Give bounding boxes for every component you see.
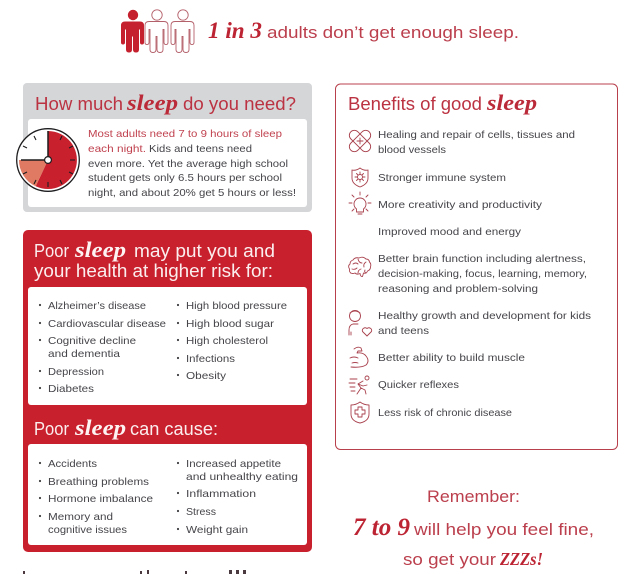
callout: remember: ZZZs! <box>499 549 543 569</box>
text block: sleep needs: Kids and teens need <box>149 143 252 155</box>
text block: sleep needs <box>88 128 296 199</box>
benefit: brain function: Better brain function including alertness, <box>378 253 586 265</box>
icon: immune shield <box>352 168 368 187</box>
list: health risks: High cholesterol <box>186 335 268 347</box>
heading: can cause <box>34 415 218 440</box>
list: effects: Accidents <box>48 458 97 470</box>
heading: can cause: sleep <box>74 415 126 440</box>
cropped text at bottom edge <box>23 570 246 574</box>
list: health risks <box>28 287 307 405</box>
heading: how much sleep: How much <box>35 94 123 114</box>
heading: higher risk: sleep <box>74 237 126 262</box>
heading: higher risk: may put you and <box>134 241 275 261</box>
panel: how much sleep do you need <box>16 83 312 212</box>
heading: benefits <box>348 90 537 115</box>
heading: how much sleep: do you need? <box>183 94 296 114</box>
list: effects: Memory and <box>48 511 113 523</box>
callout: remember: Remember: <box>427 487 520 506</box>
icon: bandage <box>347 128 373 154</box>
benefit: healing: Healing and repair of cells, tissues and <box>378 129 575 141</box>
list: effects: Breathing problems <box>48 476 149 488</box>
callout: remember: so get your <box>403 550 496 569</box>
callout: remember: 7 to 9 <box>353 514 410 541</box>
heading: higher risk <box>34 237 275 281</box>
heading: can cause: can cause: <box>130 419 218 439</box>
benefit: brain function: decision-making, focus, learning, memory, <box>378 268 587 280</box>
icon: flexed arm <box>350 347 368 367</box>
text block: sleep needs: Most adults need 7 to 9 hours of sleep <box>88 128 282 140</box>
list: health risks: High blood sugar <box>186 318 275 330</box>
list: effects: Stress <box>186 506 216 518</box>
text block: sleep needs: each night. <box>88 143 146 155</box>
list: health risks: and dementia <box>48 348 120 360</box>
headline emphasis: 1 in 3 <box>208 18 262 43</box>
benefit: muscle: Better ability to build muscle <box>378 352 525 364</box>
benefit: mood: Improved mood and energy <box>378 226 522 238</box>
icon: medical shield <box>351 402 369 423</box>
benefit: healing: blood vessels <box>378 144 446 156</box>
heading: benefits: sleep <box>486 90 537 115</box>
benefit: creativity: More creativity and productivity <box>378 199 543 211</box>
benefit: immune system: Stronger immune system <box>378 172 506 184</box>
list: health risks: Obesity <box>186 370 227 382</box>
heading: higher risk: Poor <box>34 241 69 261</box>
text block: sleep needs: night, and about 20% get 5 hours or less! <box>88 187 296 199</box>
list: effects: Inflammation <box>186 488 256 500</box>
heading: can cause: Poor <box>34 419 69 439</box>
list: effects: and unhealthy eating <box>186 471 298 483</box>
heading: benefits: Benefits of good <box>348 94 482 114</box>
list: health risks: Alzheimer’s disease <box>48 300 146 312</box>
list: health risks: Cognitive decline <box>48 335 136 347</box>
list: health risks: High blood pressure <box>186 300 287 312</box>
list: effects: cognitive issues <box>48 524 127 536</box>
list: effects <box>28 444 307 545</box>
benefit: growth: Healthy growth and development for kids <box>378 310 591 322</box>
list: effects: Weight gain <box>186 524 248 536</box>
heading: how much sleep <box>35 90 296 115</box>
list: effects: Hormone imbalance <box>48 493 153 505</box>
benefit: growth <box>378 310 591 337</box>
callout: remember: will help you feel fine, <box>413 520 594 539</box>
list: effects: Increased appetite <box>186 458 281 470</box>
benefit: growth: and teens <box>378 325 429 337</box>
text block: sleep needs: even more. Yet the average high school <box>88 158 288 170</box>
text block: sleep needs: student gets only 6.5 hours per school <box>88 172 282 184</box>
header: 1 in 3 statistic <box>121 10 519 53</box>
icon: running figure <box>349 376 369 394</box>
list: health risks: Diabetes <box>48 383 94 395</box>
icon: clock with sleep hours shaded <box>16 128 80 192</box>
icon: outlined person <box>171 10 194 53</box>
benefit: reflexes: Quicker reflexes <box>378 379 459 391</box>
icon: brain <box>349 257 371 277</box>
headline text: adults don’t get enough sleep. <box>267 23 519 42</box>
benefit: brain function <box>378 253 587 295</box>
icon: child with heart <box>349 310 372 336</box>
icon: outlined person <box>145 10 168 53</box>
benefit: healing <box>378 129 575 156</box>
panel: poor sleep risks and causes <box>23 230 312 552</box>
icon: filled person <box>121 10 144 53</box>
list: health risks: Infections <box>186 353 235 365</box>
heading: higher risk: your health at higher risk for: <box>34 261 273 281</box>
benefit: chronic disease: Less risk of chronic disease <box>378 407 512 419</box>
list: health risks: Depression <box>48 366 104 378</box>
panel: benefits of good sleep <box>336 84 618 450</box>
callout: remember <box>353 487 594 569</box>
list: health risks: Cardiovascular disease <box>48 318 166 330</box>
heading: how much sleep: sleep <box>126 90 178 115</box>
benefit: brain function: reasoning and problem-solving <box>378 283 538 295</box>
icon: light bulb <box>349 192 371 214</box>
